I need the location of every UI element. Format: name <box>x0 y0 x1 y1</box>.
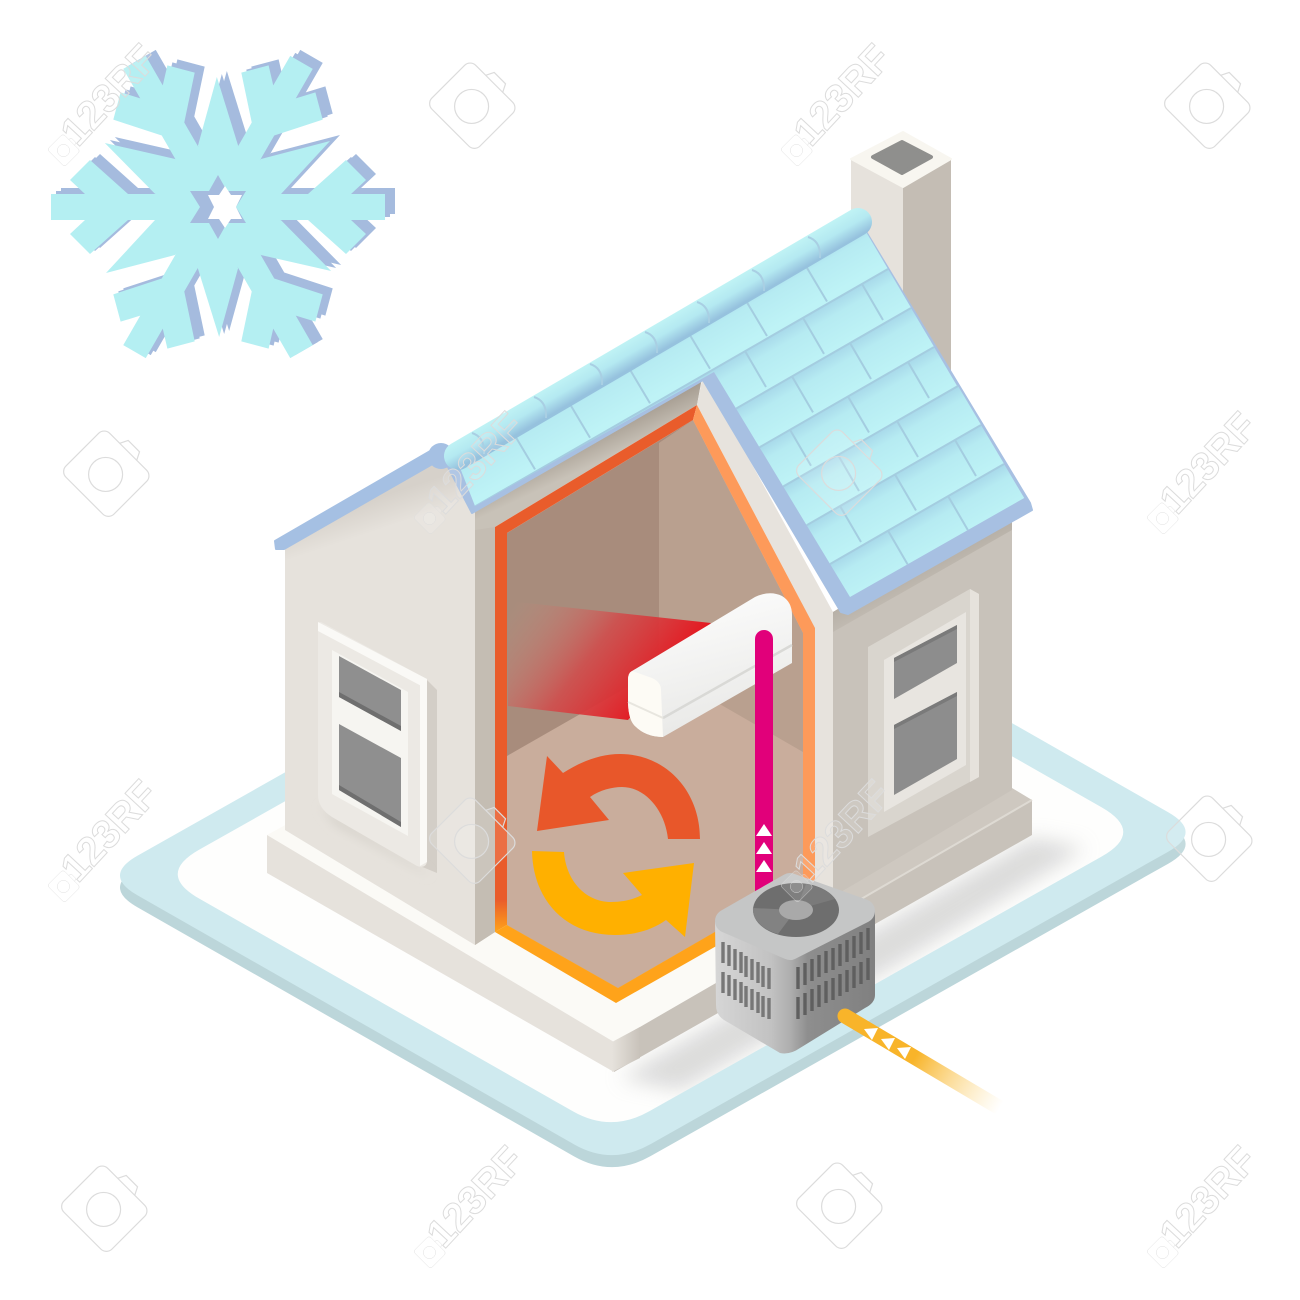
pipe flow arrows <box>756 824 772 872</box>
roof eave left <box>275 450 436 549</box>
icon: snowflake <box>51 23 395 385</box>
bottom window pane <box>339 724 401 827</box>
right wall <box>833 500 1012 897</box>
left wall <box>285 458 475 945</box>
123RF watermarks: 123RF <box>1151 404 1265 522</box>
chimney <box>851 132 951 400</box>
room floor <box>507 669 803 988</box>
ground shadow of house <box>620 838 1085 1090</box>
123RF watermarks: 123RF <box>1151 1138 1265 1256</box>
red circular arrow <box>537 754 700 839</box>
shaded plinth ledge on the right side <box>833 788 1032 902</box>
fan <box>753 883 839 937</box>
house plinth <box>267 608 1032 1072</box>
roof tile rows <box>460 233 1024 597</box>
roof underlay edge <box>447 225 1032 614</box>
roof ridge caps <box>428 222 858 469</box>
123RF watermarks: 123RF <box>785 772 899 890</box>
123RF watermarks: 123RF <box>52 772 166 890</box>
unit top <box>727 885 863 948</box>
ground pipe flow arrows <box>864 1028 911 1059</box>
123RF watermarks: 123RF <box>418 404 532 522</box>
yellow circular arrow <box>532 851 694 937</box>
123RF watermarks: 123RF <box>785 36 899 154</box>
roof <box>274 208 1033 615</box>
123RF watermarks: 123RF <box>418 1138 532 1256</box>
123RF watermarks: 123RF <box>52 36 166 154</box>
cut-away section faces <box>475 372 833 945</box>
right window lower pane <box>894 692 957 795</box>
right window upper pane <box>894 625 957 699</box>
interior room <box>507 420 803 988</box>
yellow ground pipe <box>845 1016 1000 1108</box>
outdoor heat pump unit <box>715 883 875 1053</box>
indoor air conditioning unit <box>628 593 792 737</box>
ground plate <box>120 542 1186 1167</box>
left vents <box>723 942 769 1019</box>
top window pane <box>339 656 401 731</box>
right vents <box>798 928 868 1019</box>
orange insulation frame <box>495 405 815 1003</box>
red warm air cone <box>508 601 711 720</box>
magenta refrigerant pipe <box>756 639 772 900</box>
left window <box>318 622 437 876</box>
right window <box>868 589 979 837</box>
